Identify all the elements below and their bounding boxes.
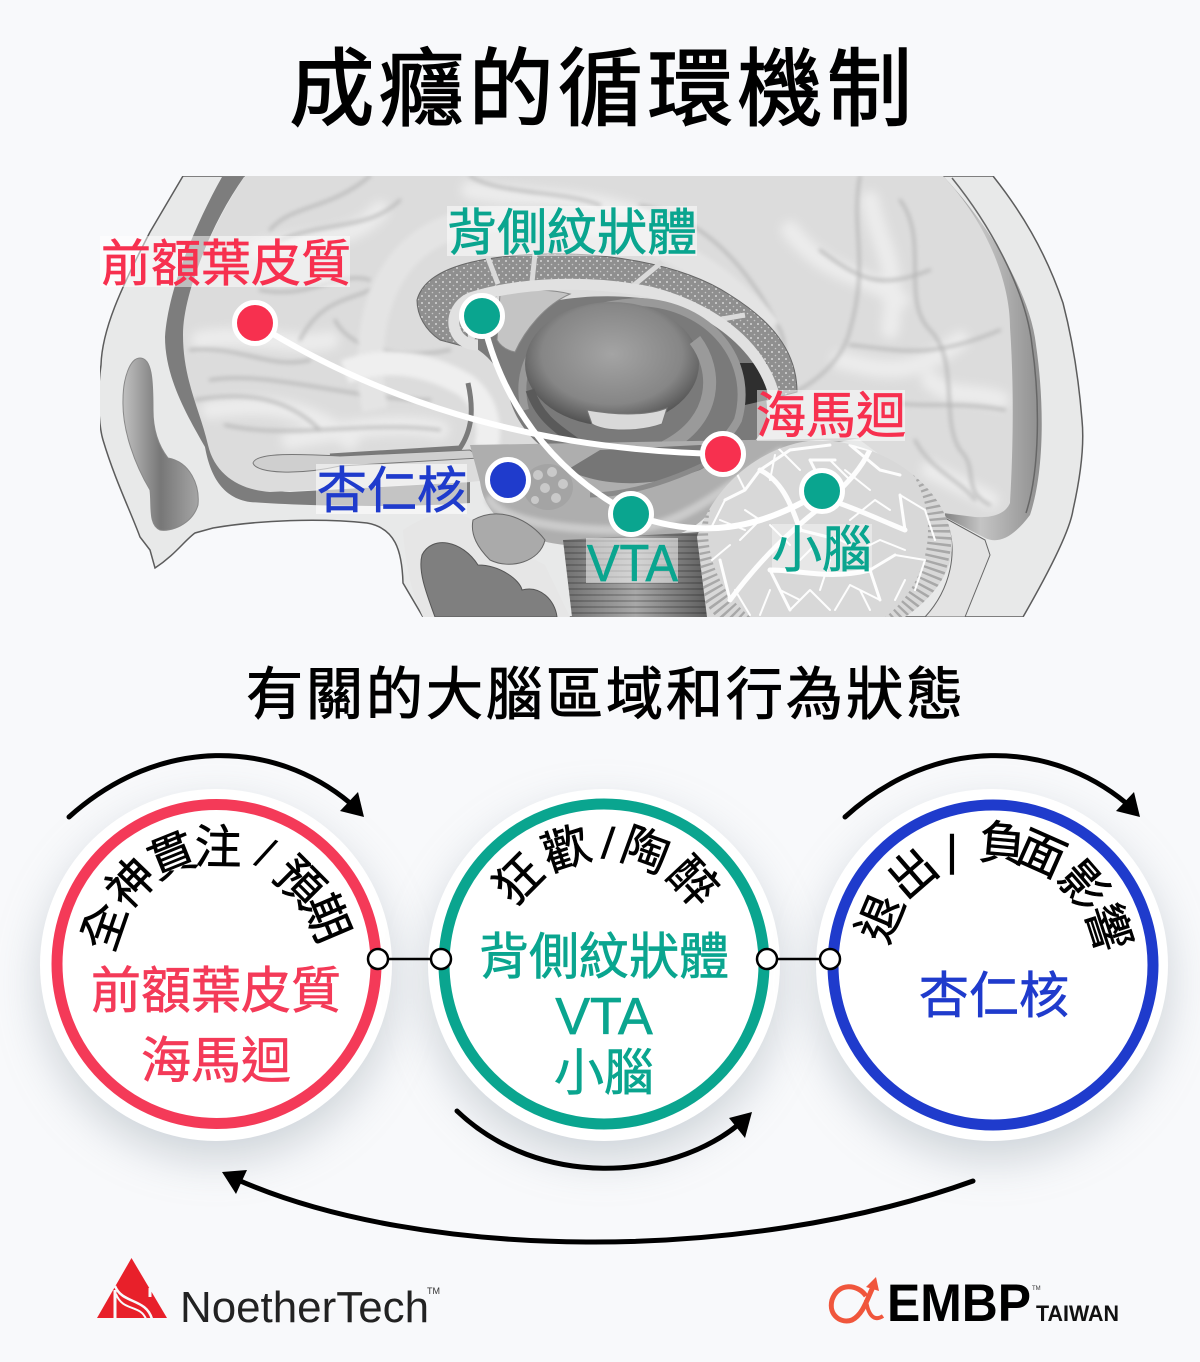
panel: withdrawal circle xyxy=(816,789,1168,1141)
state text: 全神貫注/預期 xyxy=(72,820,360,957)
frontal sinus xyxy=(123,358,198,530)
panel: binge circle xyxy=(428,789,780,1141)
state text: 狂歡/陶醉: 狂 xyxy=(483,844,554,915)
stippled band xyxy=(417,254,797,400)
brain illustration xyxy=(99,176,1083,652)
logo: EMBP Taiwan: EMBP xyxy=(887,1274,1031,1333)
icon: red triangle xyxy=(97,1258,167,1319)
amygdala xyxy=(523,464,573,510)
dot: hippocampus xyxy=(702,434,744,474)
band dividers xyxy=(488,254,745,322)
arrow: return loop xyxy=(222,1170,973,1242)
fornix ring xyxy=(518,298,746,434)
dark recess xyxy=(740,363,767,405)
state text: 狂歡/陶醉: 陶 xyxy=(615,817,677,883)
stem bands xyxy=(470,438,860,545)
corpus callosum xyxy=(454,284,778,420)
state text: 全神貫注/預期: 預 xyxy=(264,846,335,917)
thalamus crescent xyxy=(665,340,710,447)
arrow: binge loop xyxy=(457,1111,752,1168)
state text: 狂歡/陶醉: 醉 xyxy=(658,847,729,917)
septum xyxy=(497,290,570,352)
region text: 背側紋狀體 xyxy=(479,929,729,985)
sphenoid sinus xyxy=(421,543,557,617)
dot: amygdala xyxy=(488,460,528,500)
state text: 退出|負面影響: 出 xyxy=(877,838,948,909)
thalamus xyxy=(525,302,699,426)
panel: binge circle: VTA xyxy=(555,988,653,1046)
state text: 退出|負面影響: | xyxy=(946,826,958,876)
pituitary xyxy=(472,514,545,564)
panel: anticipation circle xyxy=(40,789,392,1141)
arrow: anticipation loop xyxy=(69,756,364,817)
label: dorsal striatum: 背側紋狀體 xyxy=(447,205,697,261)
state text: 全神貫注/預期: 期 xyxy=(293,886,360,950)
dot: dorsal striatum xyxy=(462,296,502,336)
dark sulcus xyxy=(330,383,471,456)
ventricle area xyxy=(474,296,768,444)
label: prefrontal cortex: 前額葉皮質 xyxy=(101,236,351,292)
state text: 全神貫注/預期: / xyxy=(248,829,282,879)
dark chord xyxy=(530,390,580,445)
cerebrum xyxy=(183,176,1013,517)
sella bone xyxy=(420,610,570,617)
panel: binge circle: 小腦 xyxy=(554,1045,654,1101)
dot: VTA xyxy=(610,494,652,534)
region text: 杏仁核 xyxy=(919,968,1069,1024)
state text: 退出|負面影響 xyxy=(847,815,1140,958)
state text: 狂歡/陶醉: / xyxy=(600,819,617,869)
state text: 退出|負面影響: 影 xyxy=(1048,850,1119,921)
state text: 全神貫注/預期: 全 xyxy=(72,896,137,957)
logo: EMBP Taiwan: TM xyxy=(1032,1286,1041,1292)
state text: 狂歡/陶醉 xyxy=(483,817,729,917)
state text: 全神貫注/預期: 神 xyxy=(96,848,167,918)
arrow: withdrawal loop xyxy=(845,756,1140,817)
gyri shading xyxy=(190,176,1005,505)
connectors between circles xyxy=(368,949,840,969)
label: amygdala: 杏仁核 xyxy=(317,463,467,519)
state text: 全神貫注/預期: 貫 xyxy=(140,822,204,889)
olfactory tract xyxy=(253,450,480,472)
connector lines in brain xyxy=(255,316,822,528)
title: 成癮的循環機制 xyxy=(289,43,917,138)
logo: NoetherTech xyxy=(97,1258,440,1332)
icon: alpha arrow xyxy=(831,1277,883,1321)
state text: 退出|負面影響: 負 xyxy=(977,815,1028,872)
skull bone xyxy=(99,176,1083,617)
state text: 全神貫注/預期: 注 xyxy=(194,820,242,874)
subcallosal gyrus xyxy=(345,363,488,448)
cerebellum xyxy=(697,440,952,617)
cingulate highlight xyxy=(358,286,778,407)
state text: 狂歡/陶醉: 歡 xyxy=(536,817,597,881)
dot: cerebellum xyxy=(802,470,842,512)
tentorium xyxy=(925,518,990,617)
label: hippocampus: 海馬迴 xyxy=(756,388,906,444)
panel: anticipation circle: 海馬迴 xyxy=(141,1033,291,1089)
state text: 退出|負面影響: 退 xyxy=(847,886,914,950)
dura front xyxy=(165,177,470,506)
state text: 退出|負面影響: 響 xyxy=(1076,897,1140,958)
label: VTA: VTA xyxy=(587,535,678,593)
brainstem xyxy=(563,532,708,617)
dot: prefrontal cortex xyxy=(234,302,276,344)
subtitle: 有關的大腦區域和行為狀態 xyxy=(246,663,966,727)
hippocampus stipple xyxy=(587,408,667,430)
state text: 退出|負面影響: 面 xyxy=(1009,820,1074,887)
logo: NoetherTech: NoetherTech xyxy=(180,1283,429,1332)
region text: 前額葉皮質 xyxy=(91,963,341,1019)
label: cerebellum: 小腦 xyxy=(772,522,872,578)
dura back xyxy=(940,176,1042,540)
folia branches xyxy=(710,440,935,615)
logo: EMBP Taiwan xyxy=(831,1274,1119,1333)
logo: EMBP Taiwan: TAIWAN xyxy=(1036,1301,1119,1326)
logo: NoetherTech: TM xyxy=(427,1286,440,1296)
